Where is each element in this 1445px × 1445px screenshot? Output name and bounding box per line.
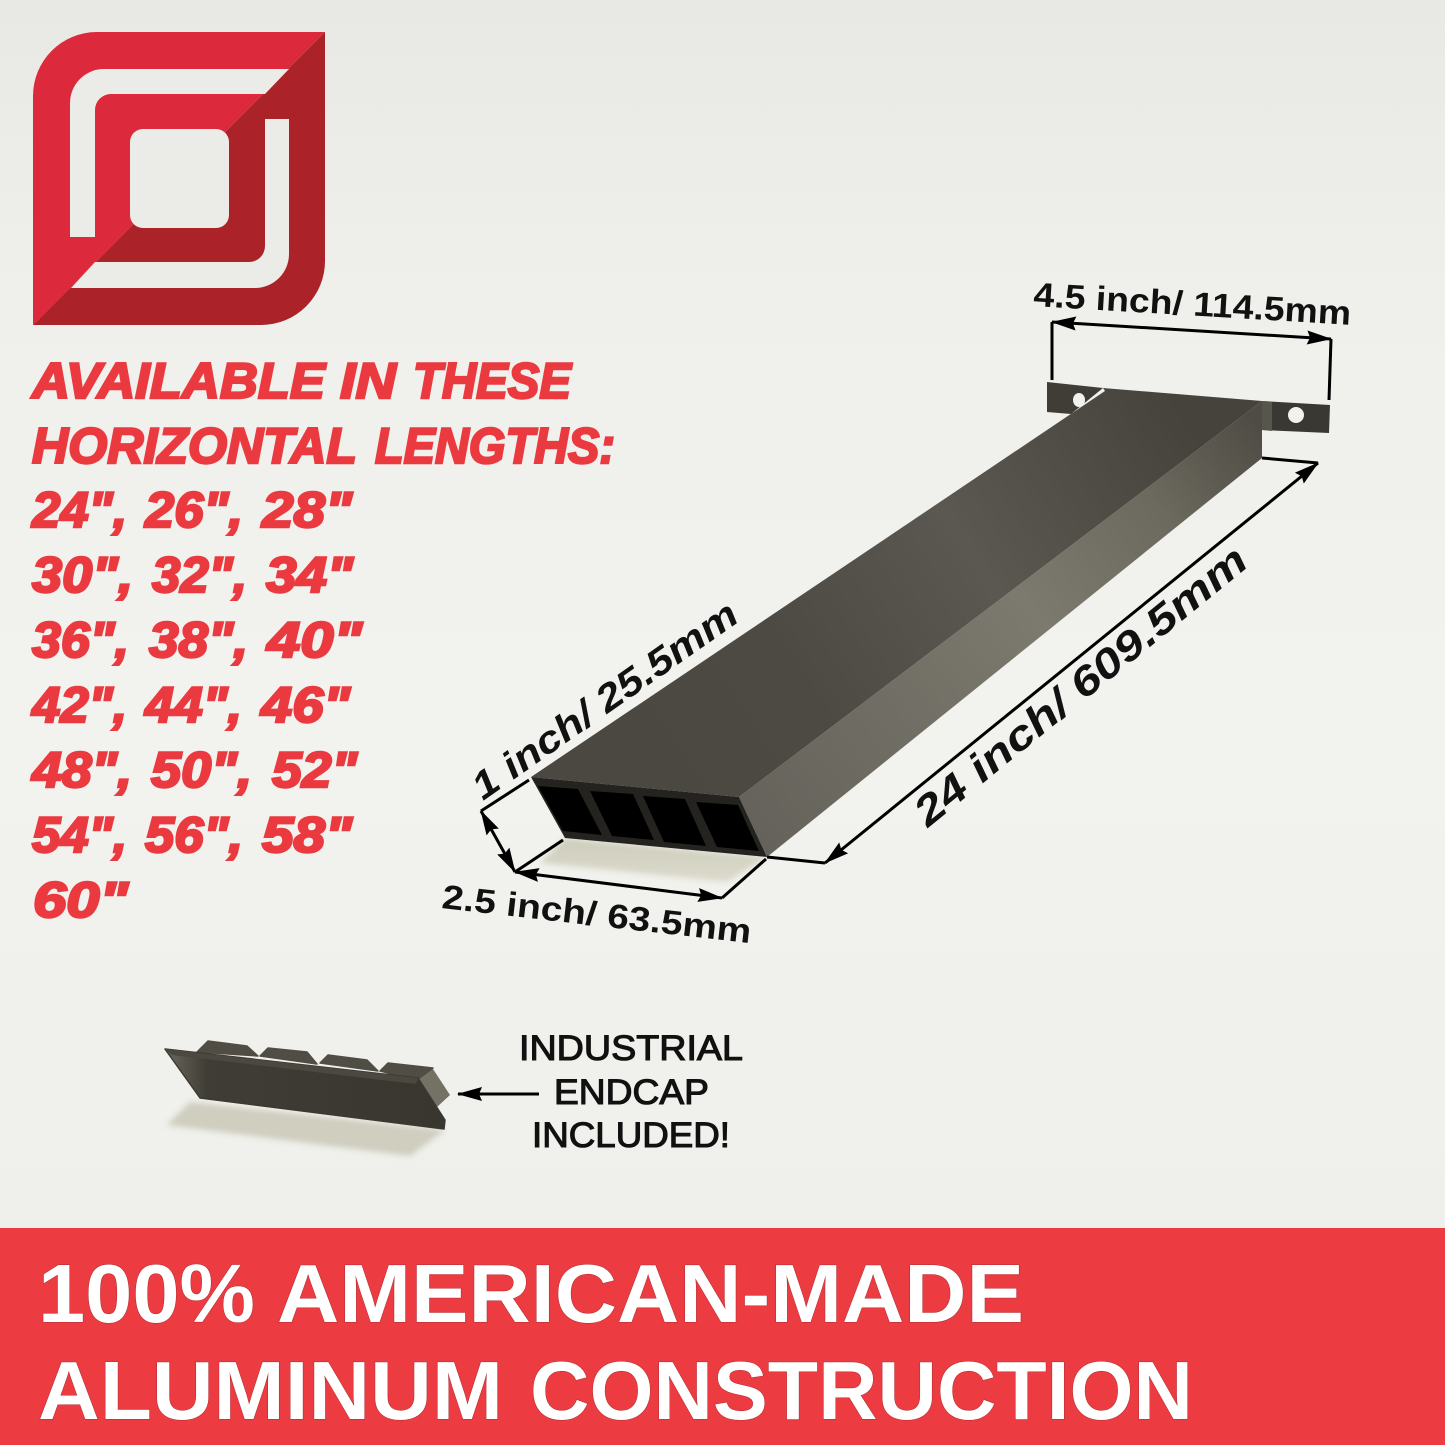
- list of lengths: 60": [33, 872, 130, 928]
- list of lengths: [31, 482, 364, 928]
- dimension: 2.5 inch: 2.5 inch/ 63.5mm: [440, 878, 753, 951]
- dimension: 24 inch: [767, 458, 1318, 863]
- list of lengths: 58": [262, 807, 353, 863]
- callout: industrial endcap: INDUSTRIAL: [519, 1029, 743, 1068]
- heading: available lengths: THESE: [413, 353, 573, 409]
- list of lengths: 34": [266, 547, 354, 603]
- list of lengths: 28": [261, 482, 353, 538]
- list of lengths: 44",: [144, 677, 242, 733]
- heading: available lengths: AVAILABLE: [30, 353, 327, 409]
- banner heading: ALUMINUM: [38, 1344, 503, 1437]
- heading: available lengths: IN: [340, 353, 397, 409]
- dimension: 2.5 inch: [440, 859, 766, 951]
- list of lengths: 46": [260, 677, 351, 733]
- callout: industrial endcap: ENDCAP: [554, 1073, 709, 1112]
- list of lengths: 56",: [145, 807, 243, 863]
- dimension: 1 inch: 1 inch/ 25.5mm: [464, 593, 746, 808]
- callout: industrial endcap: [519, 1029, 743, 1155]
- list of lengths: 50",: [151, 742, 252, 798]
- list of lengths: 32",: [152, 547, 247, 603]
- list of lengths: 42",: [31, 677, 127, 733]
- banner: [0, 1228, 1445, 1445]
- callout: industrial endcap: INCLUDED!: [532, 1116, 730, 1155]
- list of lengths: 48",: [31, 742, 132, 798]
- dimension: 4.5 inch: [1033, 276, 1352, 400]
- banner heading: CONSTRUCTION: [530, 1344, 1193, 1437]
- list of lengths: 30",: [32, 547, 133, 603]
- list of lengths: 26",: [144, 482, 243, 538]
- list of lengths: 54",: [32, 807, 127, 863]
- list of lengths: 38",: [149, 612, 248, 668]
- arrow: endcap pointer: [458, 1092, 539, 1096]
- list of lengths: 36",: [32, 612, 129, 668]
- dimension: 4.5 inch: 4.5 inch/ 114.5mm: [1033, 276, 1352, 333]
- product: endcap: [165, 1041, 450, 1156]
- heading: available lengths: LENGTHS:: [375, 418, 615, 474]
- dimension: 24 inch: 24 inch/ 609.5mm: [904, 536, 1256, 836]
- list of lengths: 52": [272, 742, 358, 798]
- dimension: 1 inch: [464, 593, 746, 872]
- product: aluminum bracket: [531, 382, 1330, 882]
- list of lengths: 24",: [31, 482, 127, 538]
- list of lengths: 40": [266, 612, 364, 668]
- banner heading: 100%: [38, 1247, 255, 1340]
- logo: [33, 32, 325, 325]
- heading: available lengths: [30, 353, 615, 474]
- heading: available lengths: HORIZONTAL: [32, 418, 357, 474]
- banner heading: AMERICAN-MADE: [277, 1247, 1024, 1340]
- banner heading: [38, 1247, 1193, 1437]
